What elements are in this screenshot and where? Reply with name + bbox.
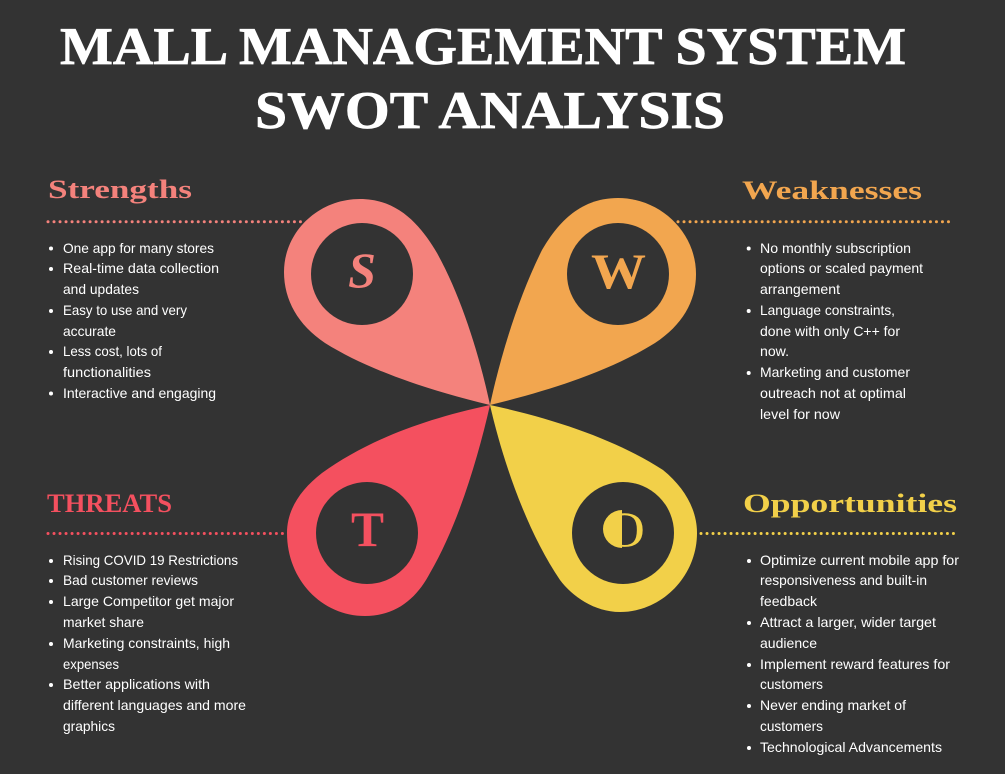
- divider: weaknesses: [678, 220, 951, 223]
- list: threats: market share: [63, 614, 144, 630]
- list: opportunities: Implement reward features for: [760, 656, 950, 672]
- list: opportunities: Attract a larger, wider target: [760, 614, 936, 630]
- list: weaknesses: arrangement: [760, 281, 840, 297]
- divider: strengths: [48, 220, 302, 223]
- list: threats: [49, 552, 246, 734]
- list: opportunities: feedback: [760, 593, 818, 609]
- list: threats: expenses: [63, 656, 119, 672]
- list: strengths: One app for many stores: [63, 240, 214, 256]
- list: strengths: accurate: [63, 323, 116, 339]
- list: threats: different languages and more: [63, 697, 246, 713]
- list: opportunities: Optimize current mobile app for: [760, 552, 959, 568]
- list: threats: Large Competitor get major: [63, 593, 234, 609]
- list: opportunities: [747, 552, 959, 755]
- divider: opportunities: [701, 532, 955, 535]
- petal: threats: [287, 405, 490, 616]
- title: SWOT ANALYSIS: [255, 82, 725, 140]
- list: weaknesses: level for now: [760, 406, 841, 422]
- heading: weaknesses: Weaknesses: [742, 176, 922, 205]
- list: weaknesses: [747, 240, 923, 422]
- title: [60, 18, 906, 140]
- list: strengths: Easy to use and very: [63, 302, 187, 318]
- list: opportunities: audience: [760, 635, 817, 651]
- letter T: T: [351, 501, 384, 557]
- list: opportunities: customers: [760, 676, 823, 692]
- divider: threats: [48, 532, 285, 535]
- petal: weaknesses: [490, 198, 696, 405]
- heading: strengths: Strengths: [48, 175, 192, 204]
- list: strengths: Interactive and engaging: [63, 385, 216, 401]
- heading: opportunities: Opportunities: [743, 489, 957, 518]
- list: strengths: functionalities: [63, 364, 151, 380]
- list: weaknesses: outreach not at optimal: [760, 385, 906, 401]
- list: weaknesses: done with only C++ for: [760, 323, 900, 339]
- letter O: O: [604, 501, 645, 557]
- list: weaknesses: Language constraints,: [760, 302, 895, 318]
- title: MALL MANAGEMENT SYSTEM: [60, 18, 906, 76]
- list: threats: Marketing constraints, high: [63, 635, 230, 651]
- list: strengths: and updates: [63, 281, 139, 297]
- list: threats: Better applications with: [63, 676, 210, 692]
- list: strengths: [49, 240, 219, 401]
- list: weaknesses: now.: [760, 343, 789, 359]
- heading: threats: THREATS: [47, 489, 172, 518]
- letter S: S: [348, 242, 376, 298]
- list: opportunities: customers: [760, 718, 823, 734]
- list: threats: Bad customer reviews: [63, 572, 198, 588]
- list: weaknesses: options or scaled payment: [760, 260, 923, 276]
- list: weaknesses: Marketing and customer: [760, 364, 910, 380]
- petal: strengths: [284, 199, 490, 405]
- list: strengths: Real-time data collection: [63, 260, 219, 276]
- letter W: W: [591, 243, 646, 299]
- list: threats: graphics: [63, 718, 115, 734]
- list: opportunities: Technological Advancements: [760, 739, 942, 755]
- petal: opportunities: [490, 405, 697, 612]
- list: opportunities: Never ending market of: [760, 697, 906, 713]
- list: strengths: Less cost, lots of: [63, 343, 162, 359]
- list: weaknesses: No monthly subscription: [760, 240, 911, 256]
- list: threats: Rising COVID 19 Restrictions: [63, 552, 238, 568]
- list: opportunities: responsiveness and built-in: [760, 572, 927, 588]
